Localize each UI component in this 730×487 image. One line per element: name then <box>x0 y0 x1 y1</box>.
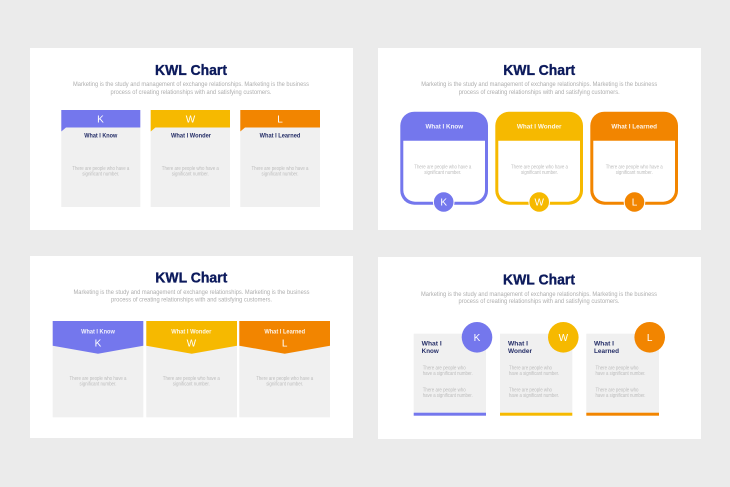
card: L: significant number. <box>616 170 653 176</box>
card: L: L <box>277 115 283 126</box>
card: K: Know <box>422 348 439 355</box>
description: process of creating relationships with and satisfying customers. <box>458 298 620 305</box>
card: W <box>500 322 579 416</box>
title: KWL Chart <box>155 270 227 286</box>
card: W: There are people who <box>509 366 552 372</box>
card: K: What I Know <box>84 132 117 139</box>
card: L: There are people who have a <box>252 166 308 172</box>
card: L <box>586 322 665 416</box>
card: K: K <box>95 338 102 349</box>
card: L: Learned <box>594 348 619 355</box>
card: K: There are people who have a <box>414 164 471 170</box>
description <box>74 289 310 304</box>
card: L: significant number. <box>262 172 298 178</box>
card: W: What I <box>508 340 528 348</box>
card: K: significant number. <box>82 172 119 178</box>
title: KWL Chart <box>155 62 227 79</box>
card: K: have a significant number. <box>423 371 473 377</box>
card: K: There are people who <box>423 388 466 394</box>
card: W <box>495 112 583 212</box>
description: Marketing is the study and management of exchange relationships. Marketing is the business <box>73 81 310 88</box>
card: W: There are people who <box>509 388 552 394</box>
card: L: There are people who <box>596 366 638 372</box>
card: L: What I Learned <box>264 328 305 336</box>
card: W: significant number. <box>173 381 210 387</box>
card: L: L <box>282 338 288 349</box>
description: process of creating relationships with and satisfying customers. <box>459 89 620 96</box>
card: W: W <box>559 333 569 344</box>
card: W: have a significant number. <box>509 371 559 377</box>
card: K <box>414 322 492 416</box>
card: W: W <box>186 115 196 126</box>
card: K: What I Know <box>81 328 116 336</box>
card: K: have a significant number. <box>423 393 473 399</box>
panel: rounded outlined cards <box>378 48 701 230</box>
card: K: What I Know <box>425 124 464 131</box>
card: L: have a significant number. <box>596 393 646 399</box>
card: W: There are people who have a <box>162 166 219 172</box>
card: K: K <box>97 115 104 126</box>
card: L: L <box>647 333 653 344</box>
card: K: There are people who have a <box>72 166 129 172</box>
card: K: K <box>474 333 481 344</box>
card: W <box>146 321 237 417</box>
card: L: L <box>632 198 638 209</box>
card: K <box>53 321 143 417</box>
description: Marketing is the study and management of exchange relationships. Marketing is the business <box>74 289 310 296</box>
card: W <box>151 110 230 207</box>
card: K <box>400 112 488 212</box>
card: W: W <box>534 198 544 209</box>
card: K <box>61 110 140 207</box>
card: L: significant number. <box>266 381 303 387</box>
card: L: There are people who <box>596 388 638 394</box>
description <box>421 81 658 96</box>
description: Marketing is the study and management of exchange relationships. Marketing is the business <box>421 291 658 298</box>
card: K: significant number. <box>80 381 116 387</box>
panel: circle badge cards <box>378 257 701 439</box>
card: L: There are people who have a <box>256 376 313 382</box>
card: W: W <box>187 338 197 349</box>
card: L: What I <box>594 340 614 348</box>
card: W: have a significant number. <box>509 393 559 399</box>
card: W: There are people who have a <box>163 376 220 382</box>
card: L <box>590 112 678 212</box>
title: KWL Chart <box>503 272 575 288</box>
card: K: There are people who <box>423 366 466 372</box>
card: L: There are people who have a <box>606 164 663 170</box>
description <box>73 81 310 96</box>
card: L <box>239 321 330 417</box>
card: L: What I Learned <box>260 132 301 139</box>
card: L <box>240 110 320 207</box>
description: Marketing is the study and management of exchange relationships. Marketing is the business <box>421 81 658 88</box>
description: process of creating relationships with and satisfying customers. <box>111 296 272 304</box>
card: W: What I Wonder <box>517 124 562 131</box>
card: W: There are people who have a <box>511 164 568 170</box>
panel: chevron header cards <box>30 256 353 438</box>
title: KWL Chart <box>503 62 575 79</box>
card: L: What I Learned <box>611 124 657 131</box>
card: W: What I Wonder <box>171 328 212 336</box>
card: L: have a significant number. <box>596 371 646 377</box>
card: K: There are people who have a <box>70 376 126 382</box>
card: W: significant number. <box>172 172 209 178</box>
card: K: What I <box>422 340 442 348</box>
card: K: K <box>440 198 447 209</box>
panel: card layout with folded headers <box>30 48 353 230</box>
description <box>421 291 658 305</box>
card: W: Wonder <box>508 348 533 355</box>
card: W: What I Wonder <box>171 132 212 139</box>
description: process of creating relationships with and satisfying customers. <box>110 89 272 96</box>
card: W: significant number. <box>521 170 558 176</box>
card: K: significant number. <box>424 170 461 176</box>
